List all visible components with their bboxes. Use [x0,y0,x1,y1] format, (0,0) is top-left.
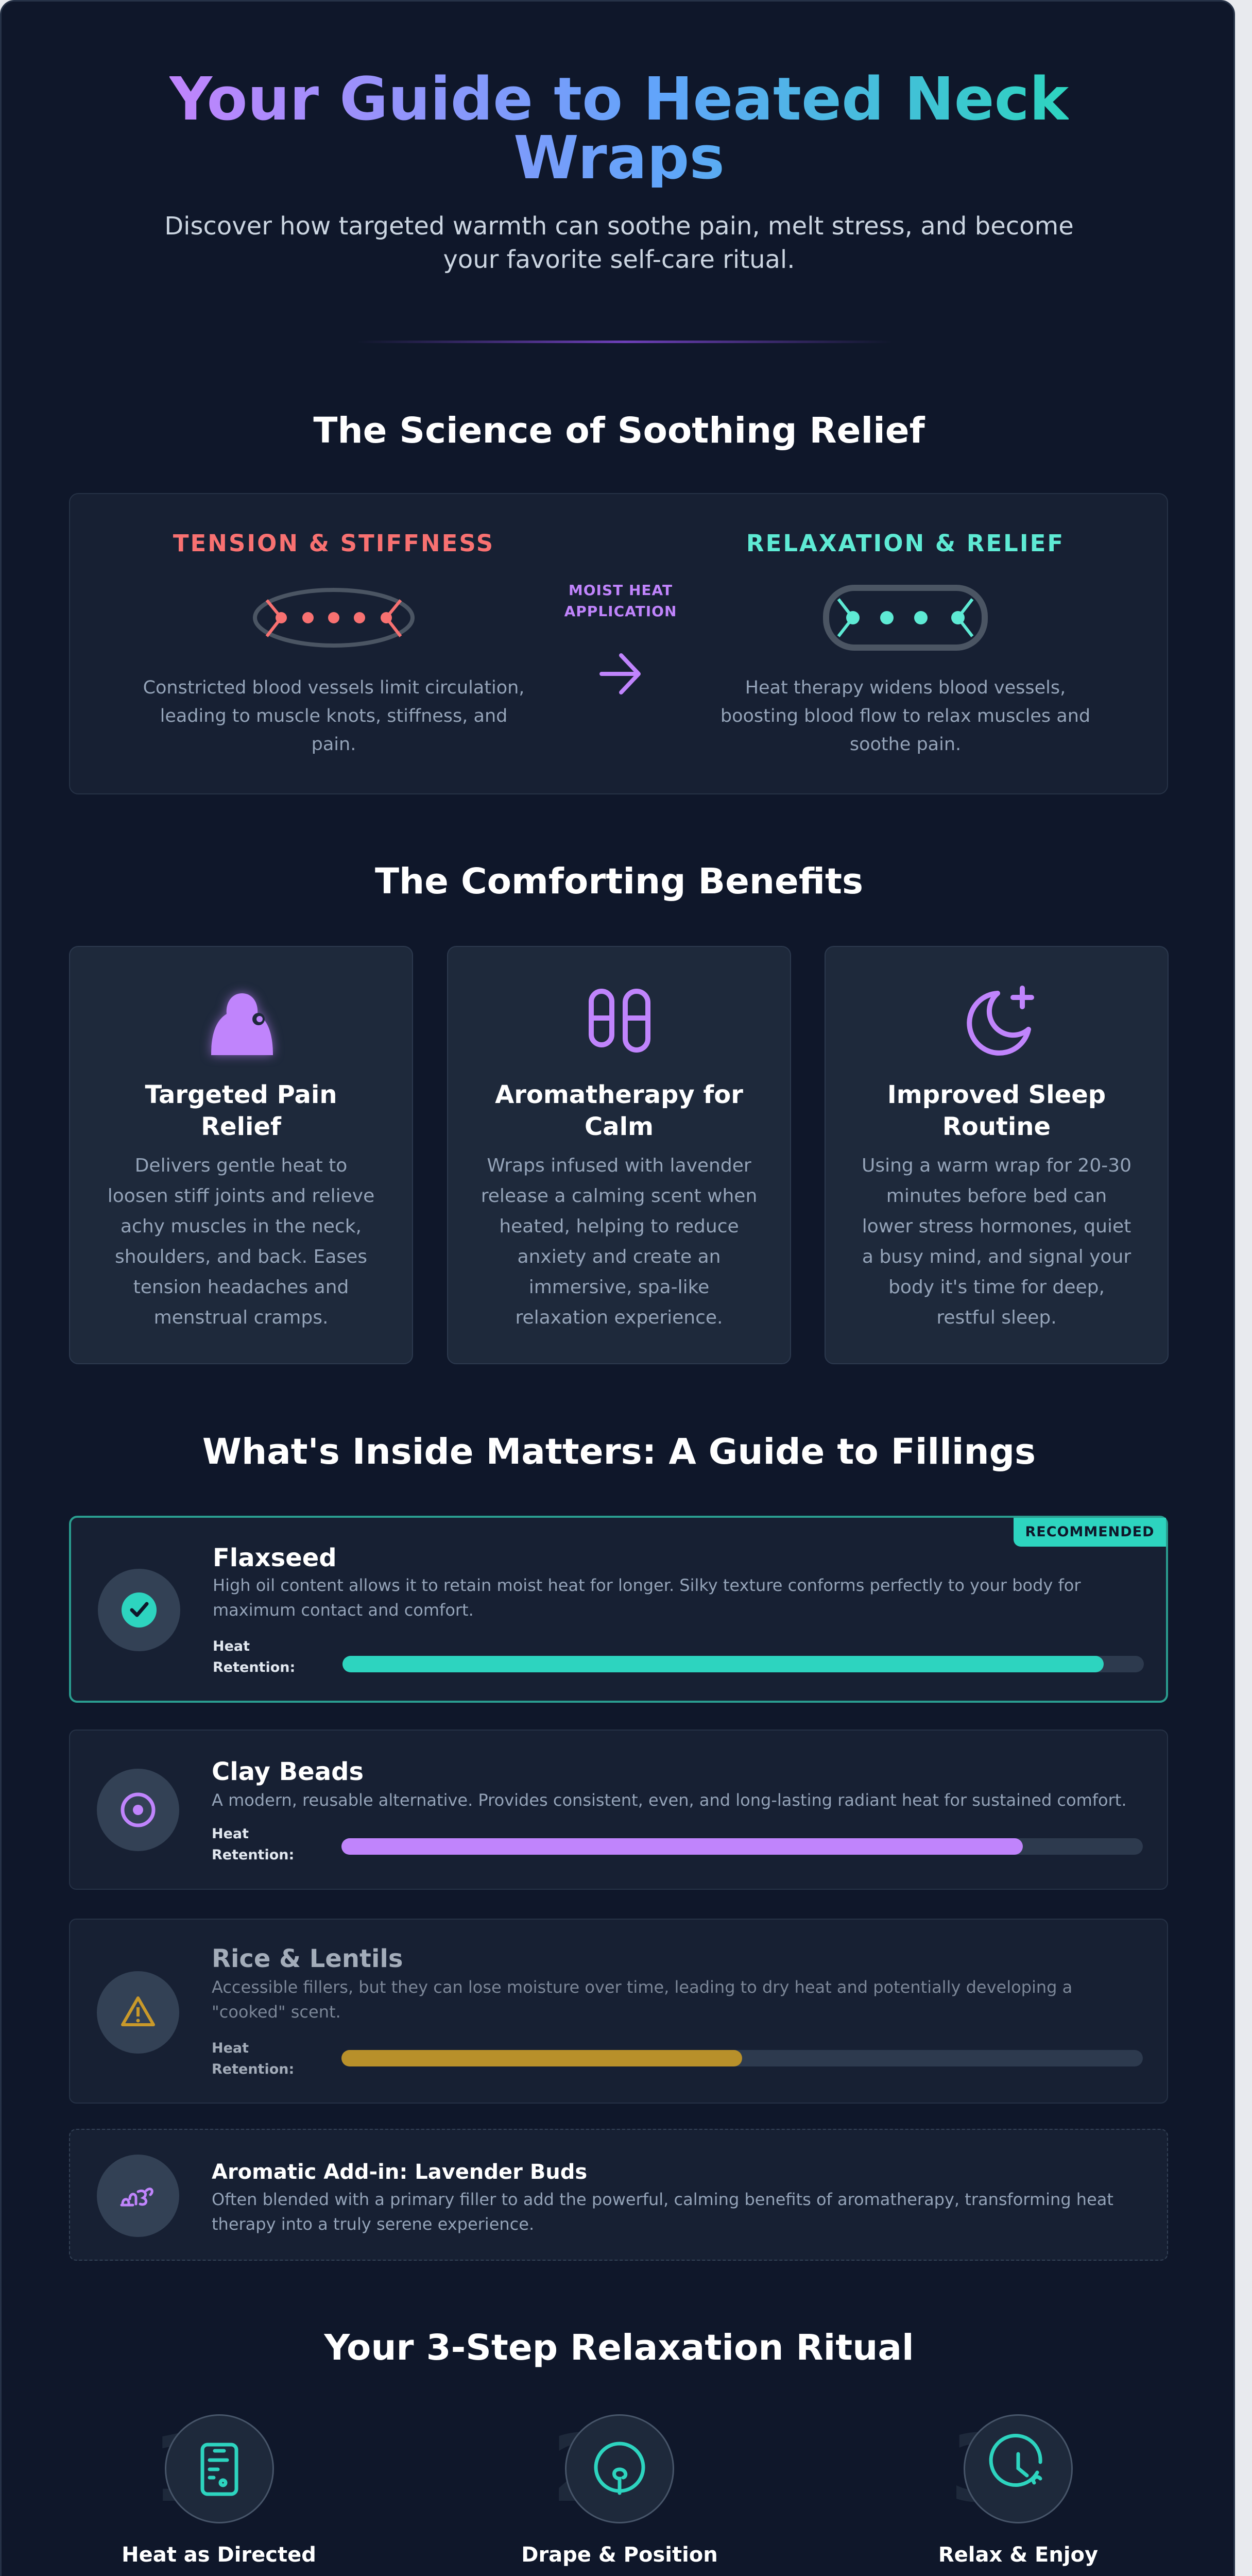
text: heated, helping to reduce [499,1216,739,1237]
text: tension desc [143,677,524,755]
label: Heat [212,2040,249,2056]
text: High oil content allows it to retain moist heat for longer. Silky texture conforms perfectly to your body for [213,1575,1081,1595]
icon: check [98,1569,180,1651]
step 3: 3 [950,2415,1015,2523]
text: Delivers gentle heat to [135,1155,347,1176]
icon: person [204,987,280,1062]
heading: tension: TENSION & STIFFNESS [173,530,494,557]
title: Rice & Lentils [212,1944,403,1973]
subtitle: Discover how targeted warmth can soothe pain, melt stress, and become [164,212,1074,241]
title [145,1080,337,1141]
label: moist heat: MOIST HEAT [569,582,673,599]
text: relief desc: soothe pain. [850,734,961,755]
title: Relief [201,1112,281,1141]
text [862,1155,1131,1328]
text: loosen stiff joints and relieve [108,1185,374,1207]
heading: relief: RELAXATION & RELIEF [746,530,1065,557]
heading: science: The Science of Soothing Relief [313,410,925,451]
title [887,1080,1106,1141]
label: Heat [212,1826,249,1842]
icon: target [97,1769,179,1851]
icon: clock [964,2414,1073,2523]
text: tension desc: pain. [312,734,356,755]
text [213,1575,1081,1620]
text: relief desc [721,677,1090,755]
text: "cooked" scent. [212,2002,341,2022]
title: Your Guide to Heated Neck [169,65,1069,134]
text [212,1977,1072,2022]
step 1: 1 [152,2415,216,2523]
label [212,1826,294,1863]
badge [1014,1518,1166,1547]
panel: lavender [69,2129,1168,2261]
panel: pain relief [69,946,413,1364]
subtitle [164,212,1074,274]
text: restful sleep. [936,1307,1057,1328]
icon: moon [967,986,1034,1056]
text: therapy into a truly serene experience. [212,2214,534,2234]
title: Improved Sleep [887,1080,1106,1109]
title: Aromatherapy for [495,1080,743,1109]
step title: Relax & Enjoy [938,2543,1098,2567]
label: Retention: [212,2061,294,2077]
text: Accessible fillers, but they can lose moisture over time, leading to dry heat and potentially developing a [212,1977,1072,1997]
title: Routine [942,1112,1051,1141]
heading: fillings: What's Inside Matters: A Guide to Fillings [202,1431,1036,1472]
step 3 [852,2413,1187,2576]
icon: drape [565,2414,674,2523]
icon: tense neck [253,588,415,648]
step 1 [122,2414,316,2567]
title: Calm [585,1112,654,1141]
label: Retention: [212,1847,294,1863]
icon: lavender [97,2155,179,2237]
text: tension desc: leading to muscle knots, stiffness, and [160,706,507,726]
title: Aromatic Add-in: Lavender Buds [212,2160,587,2184]
step 2: 2 [552,2415,616,2523]
icon: warning [97,1971,179,2054]
subtitle: your favorite self-care ritual. [443,245,795,274]
text: shoulders, and back. Eases [115,1246,367,1267]
step 2 [454,2413,788,2576]
text: body it's time for deep, [888,1277,1105,1298]
icon: device [165,2414,274,2523]
text: achy muscles in the neck, [121,1216,362,1237]
text: a busy mind, and signal your [862,1246,1131,1267]
icon: relaxed neck [823,585,988,651]
label [212,2040,294,2077]
label: moist heat: APPLICATION [564,603,677,620]
panel: science [69,493,1168,794]
bar [341,2050,1143,2066]
panel: clay beads [69,1730,1168,1890]
text [481,1155,757,1328]
step title: Drape & Position [521,2543,718,2567]
title [495,1080,743,1141]
heading: ritual: Your 3-Step Relaxation Ritual [324,2327,914,2368]
panel: flaxseed [69,1516,1168,1703]
text: menstrual cramps. [154,1307,328,1328]
panel: rice [69,1919,1168,2104]
text [108,1155,374,1328]
label [213,1638,295,1675]
text: maximum contact and comfort. [213,1600,474,1620]
title: Targeted Pain [145,1080,337,1109]
text: Using a warm wrap for 20-30 [862,1155,1131,1176]
title: Wraps [513,124,725,193]
badge: RECOMMENDED [1025,1524,1155,1540]
heading: benefits: The Comforting Benefits [375,861,863,902]
text: lower stress hormones, quiet [862,1216,1131,1237]
text: Wraps infused with lavender [487,1155,751,1176]
text: tension desc: Constricted blood vessels limit circulation, [143,677,524,698]
step title: Heat as Directed [122,2543,316,2567]
text: immersive, spa-like [529,1277,709,1298]
title: Clay Beads [212,1757,364,1786]
text: A modern, reusable alternative. Provides consistent, even, and long-lasting radiant heat for sustained comfort. [212,1790,1126,1810]
panel: aromatherapy [447,946,791,1364]
title [169,65,1069,193]
text: release a calming scent when [481,1185,757,1207]
text: Often blended with a primary filler to add the powerful, calming benefits of aromatherapy, transforming heat [212,2190,1113,2209]
text: relaxation experience. [516,1307,723,1328]
text [212,2190,1113,2234]
text: relief desc: boosting blood flow to relax muscles and [721,706,1090,726]
label: Retention: [213,1659,295,1675]
icon: capsules [589,989,650,1053]
label: Heat [213,1638,250,1654]
text: relief desc: Heat therapy widens blood vessels, [745,677,1066,698]
label: moist heat [564,582,677,620]
text: tension headaches and [133,1277,349,1298]
bar [342,1656,1144,1672]
arrow [599,653,641,694]
text: minutes before bed can [886,1185,1107,1207]
title: Flaxseed [213,1544,337,1572]
text: anxiety and create an [518,1246,721,1267]
panel: sleep [825,946,1169,1364]
bar [341,1838,1143,1855]
